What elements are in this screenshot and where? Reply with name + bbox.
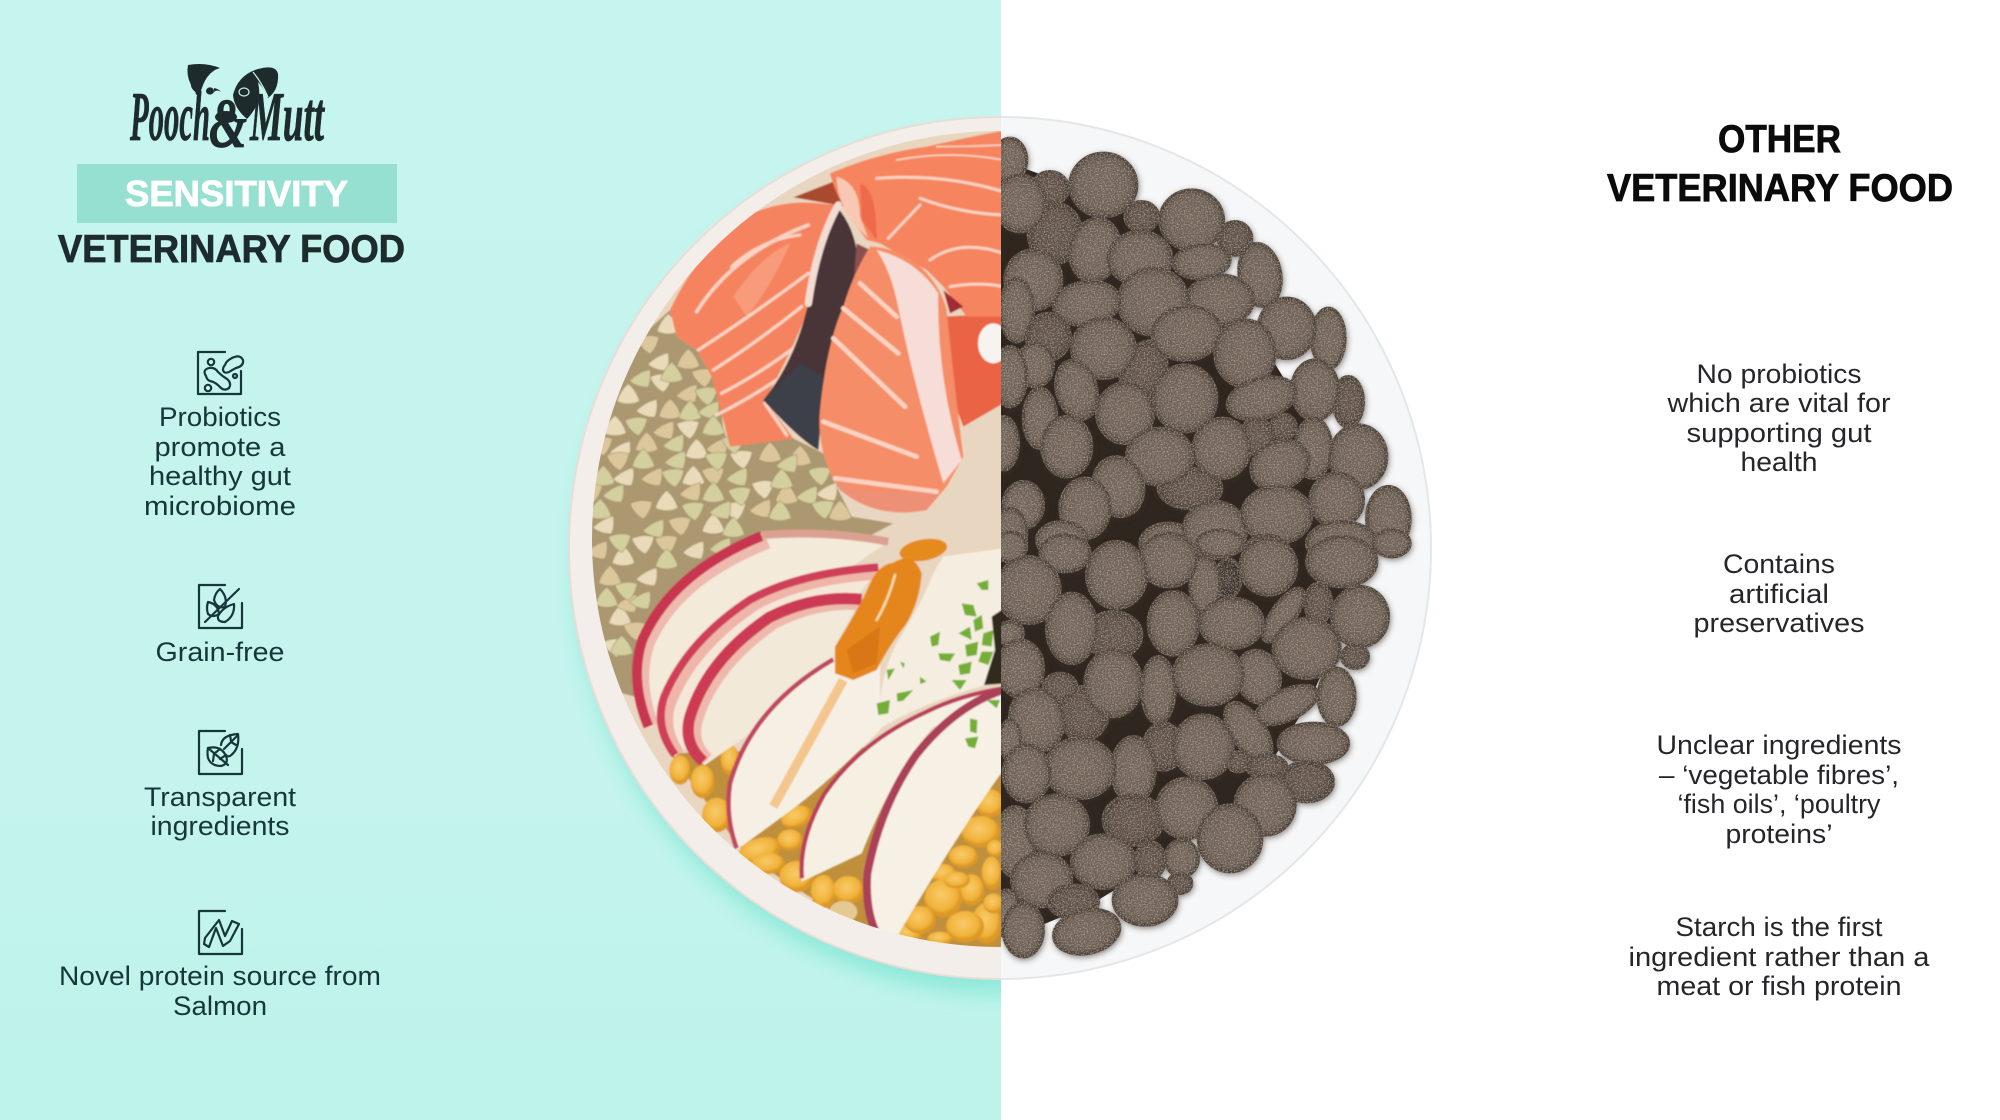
point: no probiotics: supporting gut xyxy=(1686,418,1872,448)
icon: protein helix xyxy=(199,911,242,954)
logo: dog ears and eyes xyxy=(187,64,278,123)
bowl rim right xyxy=(1001,116,1432,980)
heading: left veterinary food: VETERINARY FOOD xyxy=(58,228,405,271)
panel: mint background xyxy=(0,0,1001,1120)
point: unclear ingredients: – ‘vegetable fibres’, xyxy=(1659,760,1899,790)
apple slice right upper xyxy=(880,548,1003,728)
label: probiotics text: microbiome xyxy=(144,491,296,521)
point: unclear ingredients: Unclear ingredients xyxy=(1656,730,1902,760)
point: no probiotics: No probiotics xyxy=(1696,359,1862,389)
point: starch first: ingredient rather than a xyxy=(1628,942,1931,972)
chickpeas xyxy=(669,745,1004,945)
point: artificial preservatives: Contains xyxy=(1723,549,1835,579)
salmon fillet right xyxy=(943,313,1003,427)
heading: other veterinary food: OTHER xyxy=(1718,118,1841,161)
label: transparent ingredients text: Transparent xyxy=(144,782,297,812)
apple slice 4 xyxy=(727,658,880,850)
heading: other veterinary food xyxy=(1607,118,1953,210)
label: transparent ingredients text xyxy=(144,782,297,841)
label: novel protein text: Salmon xyxy=(173,991,267,1021)
label: probiotics text: healthy gut xyxy=(149,461,292,491)
label: novel protein text: Novel protein source from xyxy=(59,961,381,991)
point: starch first xyxy=(1628,912,1931,1001)
kibble gap shadow xyxy=(1001,160,1350,930)
apple slice 5 xyxy=(801,687,1003,882)
bowl rim left xyxy=(568,116,1001,980)
panel: white background xyxy=(1001,0,2000,1120)
point: artificial preservatives: preservatives xyxy=(1694,608,1864,638)
logo wordmark: Pooch xyxy=(130,79,210,156)
apple slice 3 xyxy=(683,594,863,765)
banner: sensitivity: SENSITIVITY xyxy=(125,173,348,214)
label: probiotics text xyxy=(144,402,296,521)
buckwheat grains xyxy=(580,314,851,657)
icon: bacteria xyxy=(198,352,243,394)
benefit: novel protein xyxy=(59,911,381,1021)
apple slice 1 xyxy=(635,533,888,728)
food contents xyxy=(592,131,1001,947)
point: no probiotics: health xyxy=(1740,447,1818,477)
point: no probiotics xyxy=(1666,359,1890,477)
label: novel protein text xyxy=(59,961,381,1021)
point: unclear ingredients: ‘fish oils’, ‘poultry xyxy=(1678,789,1881,819)
apple slice 2 xyxy=(657,565,880,757)
logo: ear line and eye xyxy=(239,72,268,97)
label: probiotics text: Probiotics xyxy=(159,402,281,432)
label: transparent ingredients text: ingredients xyxy=(150,811,290,841)
pulse base xyxy=(670,743,1003,950)
salmon fillet centre xyxy=(819,247,1009,512)
point: starch first: meat or fish protein xyxy=(1656,971,1902,1001)
label: probiotics text: promote a xyxy=(154,432,287,462)
salmon fillet left xyxy=(670,202,838,447)
benefit: probiotics xyxy=(144,352,296,521)
banner: sensitivity xyxy=(77,164,397,223)
benefit: grain-free xyxy=(156,585,284,667)
heading: other veterinary food: VETERINARY FOOD xyxy=(1607,167,1953,210)
label: grain-free text: Grain-free xyxy=(156,637,284,667)
point: unclear ingredients xyxy=(1656,730,1902,849)
point: unclear ingredients: proteins’ xyxy=(1726,819,1832,849)
bowl shadow on mint xyxy=(565,496,1001,1004)
icon: grain xyxy=(199,585,242,628)
logo xyxy=(130,64,325,163)
capsule dropper xyxy=(773,535,949,807)
buckwheat base xyxy=(592,310,893,697)
point: no probiotics: which are vital for xyxy=(1666,388,1890,418)
salmon fillet top xyxy=(793,131,1003,317)
point: starch first: Starch is the first xyxy=(1676,912,1883,942)
point: artificial preservatives xyxy=(1694,549,1864,638)
benefit: transparent ingredients xyxy=(144,731,297,841)
kibble pieces xyxy=(988,138,1410,960)
salmon skin xyxy=(763,205,870,450)
bowl: fresh food half xyxy=(568,116,1001,980)
apple slice 6 xyxy=(863,687,1003,952)
icon: leaves xyxy=(199,731,242,774)
bowl: kibble half xyxy=(1001,116,1432,980)
logo wordmark: Mutt xyxy=(249,79,325,156)
point: artificial preservatives: artificial xyxy=(1729,579,1829,609)
logo wordmark: & xyxy=(209,86,247,163)
green herb flecks xyxy=(877,580,1000,748)
